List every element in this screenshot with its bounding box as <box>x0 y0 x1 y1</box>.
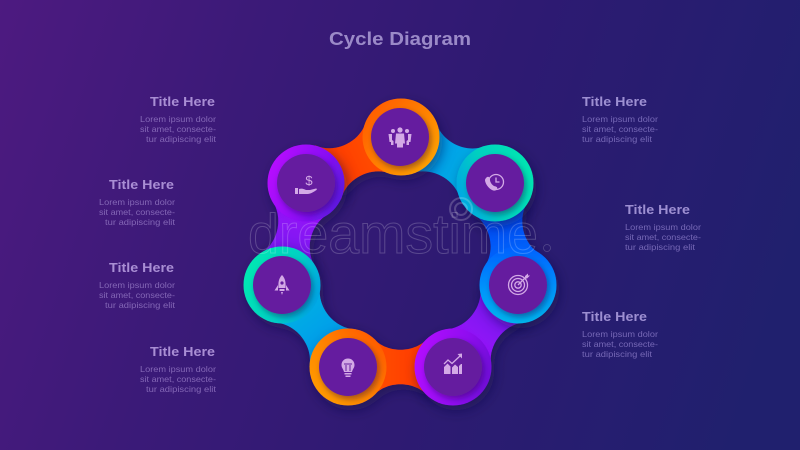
text block: lower left: tur adipiscing elit <box>105 300 176 310</box>
text block: bottom left: Lorem ipsum dolor <box>140 364 216 374</box>
text block: bottom right: sit amet, consecte- <box>582 339 658 349</box>
text block: lower left: Lorem ipsum dolor <box>99 280 175 290</box>
inner disc: bulb <box>319 338 377 396</box>
icon: phone clock <box>485 174 504 191</box>
inner disc: rocket <box>253 256 311 314</box>
node ring: orange bulb with red link <box>310 328 429 406</box>
text block: top left: tur adipiscing elit <box>146 134 217 144</box>
text block: bottom left: sit amet, consecte- <box>140 374 216 384</box>
inner disc: phone <box>466 154 524 212</box>
text block: bottom left: tur adipiscing elit <box>146 384 217 394</box>
icon: bulb <box>342 358 354 377</box>
icon: dollar hand: $ <box>305 173 313 188</box>
text block: middle right: tur adipiscing elit <box>625 242 696 252</box>
icon: target <box>508 274 530 294</box>
node ring: orange top with red link <box>315 98 440 199</box>
text block: top left: Title Here <box>150 94 215 109</box>
title: Cycle Diagram <box>329 29 471 49</box>
text block: bottom right: Lorem ipsum dolor <box>582 329 658 339</box>
text block: top right: Lorem ipsum dolor <box>582 114 658 124</box>
node ring: purple chart with purple link <box>414 285 527 406</box>
text block: middle right <box>625 202 701 252</box>
node ring: teal phone <box>456 144 534 222</box>
inner disc: dollar <box>277 154 335 212</box>
text block: top right <box>582 94 658 144</box>
text block: bottom right <box>582 309 658 359</box>
icon: chart <box>444 354 462 374</box>
text block: bottom left: Title Here <box>150 344 215 359</box>
icon: dollar hand <box>295 173 317 194</box>
text block: upper left <box>99 177 176 227</box>
text block: bottom left <box>140 344 217 394</box>
watermark: dreamstime <box>248 202 538 265</box>
link: teal to orange <box>409 120 487 199</box>
node ring: blue target with blue link <box>471 199 556 324</box>
text block: upper left: sit amet, consecte- <box>99 207 175 217</box>
node ring: teal rocket with cyan link <box>244 246 356 367</box>
text block: lower left: sit amet, consecte- <box>99 290 175 300</box>
text block: lower left <box>99 260 176 310</box>
icon: team <box>388 127 412 148</box>
inner disc: chart <box>424 338 482 396</box>
text block: top right: sit amet, consecte- <box>582 124 658 134</box>
text block: top right: tur adipiscing elit <box>582 134 653 144</box>
text block: bottom right: Title Here <box>582 309 647 324</box>
text block: top right: Title Here <box>582 94 647 109</box>
text block: upper left: Lorem ipsum dolor <box>99 197 175 207</box>
text block: top left: sit amet, consecte- <box>140 124 216 134</box>
icon: rocket <box>274 275 290 295</box>
text block: bottom right: tur adipiscing elit <box>582 349 653 359</box>
inner disc: target <box>489 256 547 314</box>
text block: middle right: Title Here <box>625 202 690 217</box>
node ring: purple dollar with purple link <box>258 144 344 269</box>
text block: top left: Lorem ipsum dolor <box>140 114 216 124</box>
inner disc: team <box>371 108 429 166</box>
text block: upper left: Title Here <box>109 177 174 192</box>
text block: middle right: Lorem ipsum dolor <box>625 222 701 232</box>
text block: upper left: tur adipiscing elit <box>105 217 176 227</box>
text block: middle right: sit amet, consecte- <box>625 232 701 242</box>
text block: top left <box>140 94 217 144</box>
text block: lower left: Title Here <box>109 260 174 275</box>
